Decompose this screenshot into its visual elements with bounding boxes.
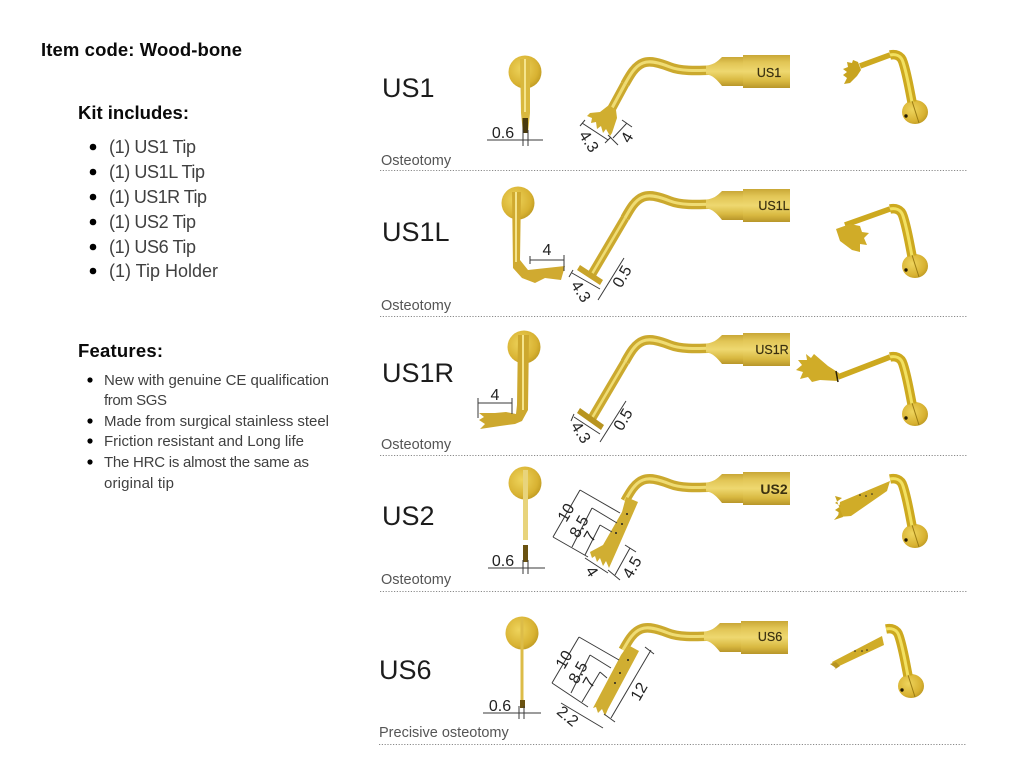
US1R tool dimensions: 0.5 — [611, 406, 637, 434]
US2 tool dimensions: 4.5 — [620, 554, 646, 582]
US6 width dimension: 0.6 — [489, 698, 511, 715]
panel: US1L — [381, 186, 928, 314]
US2 label: US2 — [382, 501, 435, 531]
US6 caption: Precisive osteotomy — [379, 725, 509, 741]
US1L length dimension — [530, 242, 564, 271]
kit list: (1) US6 Tip — [109, 237, 196, 257]
US6 label: US6 — [379, 655, 432, 685]
US2 tool dimensions: 8.5 — [567, 513, 593, 541]
US1 tool — [587, 55, 790, 136]
features list — [87, 372, 329, 492]
US2 tool dimensions: 10 — [555, 501, 579, 525]
US1 side view — [843, 55, 928, 124]
US6 tool dimensions: 12 — [628, 680, 652, 704]
US1 front view — [508, 56, 542, 133]
US1R length dimension: 4 — [491, 387, 500, 404]
panel: US2 — [381, 466, 928, 588]
US1 label: US1 — [382, 73, 435, 103]
US1L tool dimensions: 4.3 — [567, 278, 593, 306]
US1R caption: Osteotomy — [381, 437, 452, 453]
US1L tool dimensions — [567, 258, 636, 306]
US2 front view — [508, 466, 542, 562]
US2 tool dimensions: 7 — [581, 529, 600, 545]
panel: US1R — [381, 330, 928, 453]
panel: US6: US6 — [758, 630, 782, 644]
US1 tool dimensions — [575, 120, 637, 156]
US2 caption: Osteotomy — [381, 572, 452, 588]
US6 tool dimensions: 10 — [553, 648, 577, 672]
US1L tool dimensions: 0.5 — [610, 263, 636, 291]
US6 tool dimensions: 7 — [580, 675, 599, 691]
US1R tool — [625, 333, 790, 366]
US1R side view — [796, 354, 928, 426]
US1R tool dimensions: 4.3 — [567, 419, 593, 447]
features list: Made from surgical stainless steel — [104, 413, 329, 430]
US1 width dimension — [487, 125, 543, 146]
US6 width dimension — [483, 698, 541, 719]
heading: features: Features: — [78, 340, 163, 361]
US1R front view — [479, 330, 540, 429]
US1L length dimension: 4 — [543, 242, 552, 259]
left column: title: Item code: Wood-bone — [41, 39, 242, 60]
kit list: (1) US1 Tip — [109, 137, 196, 157]
features list: The HRC is almost the same as — [104, 454, 309, 471]
kit list: (1) US1L Tip — [109, 162, 205, 182]
kit list: (1) US2 Tip — [109, 212, 196, 232]
US1 tool dimensions: 4 — [618, 130, 637, 146]
panel: US1L: US1L — [758, 199, 790, 213]
US6 side view — [830, 629, 924, 698]
US1L tool — [625, 189, 790, 222]
panel: US2: US2 — [760, 481, 788, 497]
US2 side view — [834, 479, 928, 548]
features list: New with genuine CE qualification — [104, 372, 329, 389]
US1L side view — [836, 209, 928, 278]
US6 tool dimensions: 8.5 — [566, 659, 592, 687]
US1 tool: US1 — [757, 66, 781, 80]
US1 caption: Osteotomy — [381, 153, 452, 169]
kit list: (1) US1R Tip — [109, 187, 207, 207]
US2 tool dimensions: 4 — [582, 563, 601, 580]
panel: US1 — [381, 55, 928, 169]
panel: US6 — [379, 616, 924, 741]
US6 tool dimensions — [552, 637, 654, 731]
features list: Friction resistant and Long life — [104, 433, 304, 450]
panel: US1R: US1R — [755, 343, 789, 357]
US1 tool dimensions: 4.3 — [575, 128, 601, 156]
heading: kit includes: Kit includes: — [78, 102, 189, 123]
US1R tool dimensions — [567, 401, 637, 447]
US2 width dimension: 0.6 — [492, 553, 514, 570]
kit list — [90, 137, 218, 281]
US2 tool dimensions — [553, 490, 646, 582]
US6 tool dimensions: 2.2 — [553, 703, 581, 731]
features list: from SGS — [104, 392, 167, 409]
US6 front view — [506, 616, 538, 708]
US1L caption: Osteotomy — [381, 298, 452, 314]
US6 tool — [623, 621, 788, 654]
kit list: (1) Tip Holder — [109, 261, 218, 281]
US1R label: US1R — [382, 358, 454, 388]
US1L label: US1L — [382, 217, 450, 247]
US1L front view — [502, 186, 565, 283]
features list: original tip — [104, 475, 174, 492]
US1R length dimension — [478, 387, 512, 418]
US1 width dimension: 0.6 — [492, 125, 514, 142]
US2 tool — [625, 472, 790, 505]
US2 width dimension — [488, 553, 545, 574]
